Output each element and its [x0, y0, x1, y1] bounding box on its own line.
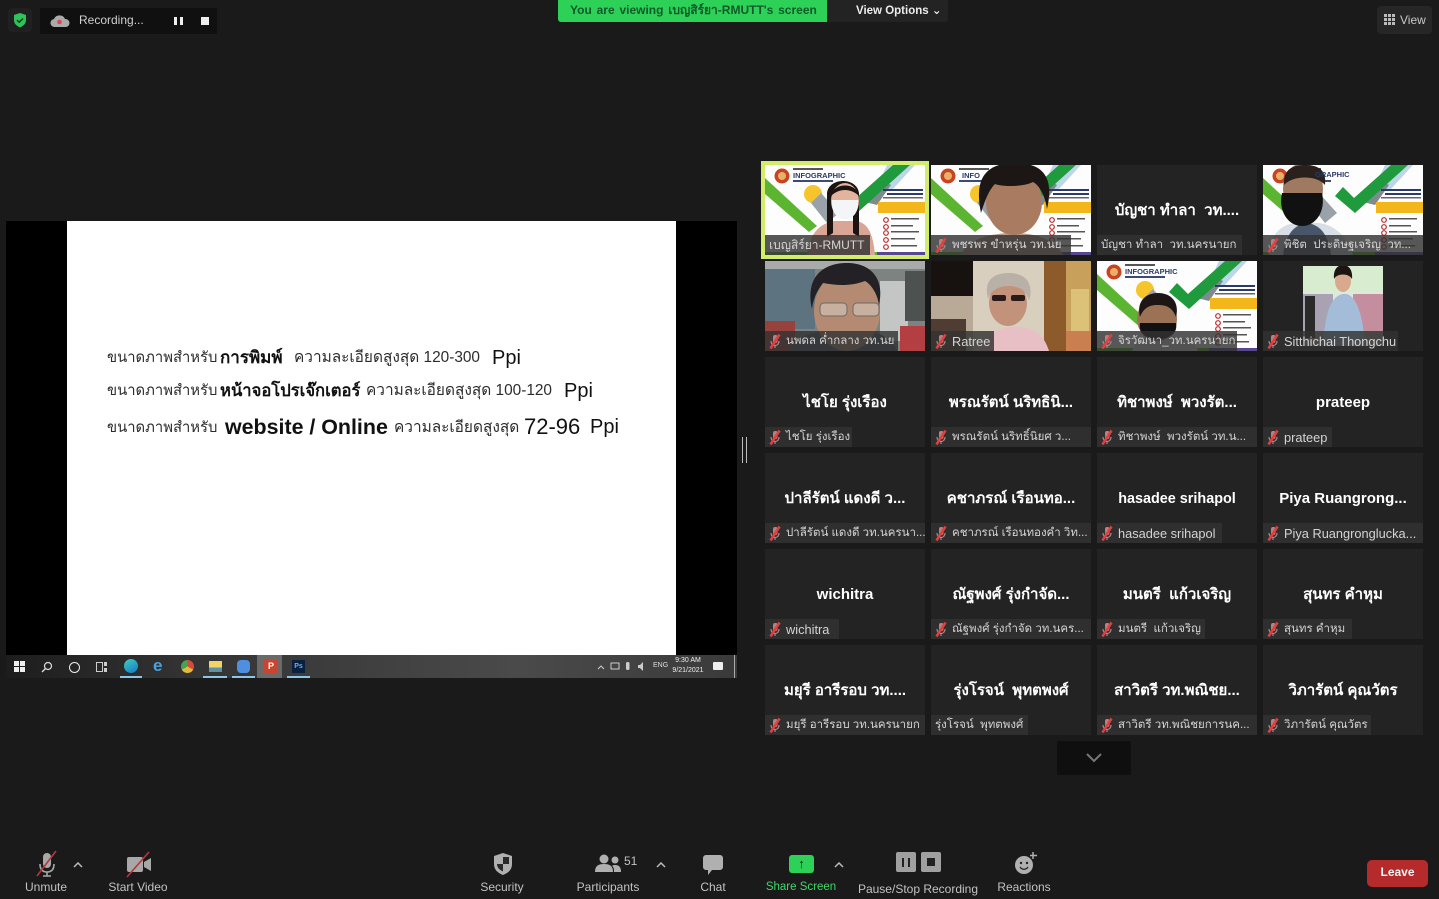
unmute label: Unmute	[25, 880, 67, 894]
name label	[765, 619, 839, 639]
security shield badge	[8, 8, 32, 32]
name label: Sitthichai Thongchu	[1284, 334, 1396, 349]
icon: recording cloud	[50, 15, 70, 27]
chat button	[700, 855, 726, 894]
icon: stop recording	[921, 852, 941, 872]
icon: chrome	[181, 660, 194, 673]
name label: บัญชา ทำลา วท.นครนายก	[1101, 239, 1236, 251]
display name: ทิชาพงษ์ พวงรัต...	[1117, 394, 1237, 411]
green viewing banner	[558, 0, 827, 22]
icon: chat bubble	[703, 855, 723, 875]
name label	[1263, 619, 1352, 639]
slide line 2: projector resolution: หน้าจอโปรเจ๊กเตอร์	[220, 381, 360, 400]
icon: zoom app	[237, 660, 250, 673]
slide line 1: print resolution: ขนาดภาพสำหรับ	[107, 350, 217, 366]
tile: คชาภรณ์ เรือนทองคำ	[931, 453, 1091, 543]
icon: grid	[1384, 14, 1395, 25]
display name: พรณรัตน์ นริทธินิ...	[949, 394, 1073, 411]
name label: พิชิต ประดิษฐเจริญ วท...	[1284, 239, 1411, 251]
tile: ทิชาพงษ์ พวงรัตน์	[1097, 357, 1257, 447]
name label	[1263, 235, 1423, 255]
tile: พิชิต ประดิษฐเจริญ	[1263, 165, 1423, 255]
name label: wichitra	[786, 622, 829, 637]
participants button	[577, 854, 639, 894]
icon: pause	[174, 17, 183, 25]
name label	[931, 523, 1091, 543]
icon: smiley with plus	[1015, 852, 1037, 874]
leave button	[1367, 860, 1428, 887]
icon: photoshop: Ps	[294, 663, 303, 670]
slide line 2: projector resolution: ขนาดภาพสำหรับ	[107, 383, 217, 399]
slide page	[67, 221, 676, 655]
pause stop recording button	[858, 852, 978, 896]
share screen button	[766, 855, 836, 893]
slide line 3: web resolution	[107, 414, 619, 439]
name label	[931, 427, 1091, 447]
icon: muted microphone	[36, 850, 56, 877]
name label	[765, 523, 925, 543]
display name: ณัฐพงศ์ รุ่งกำจัด...	[952, 586, 1070, 603]
icon: share caret	[834, 862, 844, 868]
name label	[1097, 331, 1237, 351]
tile: สาวิตรี วท.พณิชย	[1097, 645, 1257, 735]
display name: Piya Ruangrong...	[1279, 490, 1407, 507]
name label	[1263, 523, 1423, 543]
name label: มยุรี อารีรอบ วท.นครนายก	[786, 719, 920, 731]
name label	[931, 331, 994, 351]
tile: พชรพร ขำหรุ่น	[931, 165, 1091, 255]
tile: prateep	[1263, 357, 1423, 447]
display name: มยุรี อารีรอบ วท....	[784, 682, 906, 699]
name label: คชาภรณ์ เรือนทองคำ วิท...	[952, 527, 1088, 539]
name label	[931, 715, 1028, 735]
toolbar	[25, 850, 1428, 896]
name label: hasadee srihapol	[1118, 526, 1215, 541]
display name: ปาลีรัตน์ แดงดี ว...	[785, 490, 905, 507]
tile: เบญสิร์ยา-RMUTT: INFOGRAPHIC	[793, 171, 846, 180]
recording label: Recording...	[79, 13, 144, 27]
icon: file explorer	[209, 661, 222, 672]
security button	[480, 853, 524, 894]
tile: รุ่งโรจน์ พุทตพงศ์	[931, 645, 1091, 735]
icon: search	[42, 662, 52, 672]
name label	[1097, 523, 1222, 543]
display name: สาวิตรี วท.พณิชย...	[1114, 682, 1240, 699]
display name: มนตรี แก้วเจริญ	[1123, 586, 1231, 603]
icon: audio caret	[74, 862, 82, 868]
slide line 1: print resolution: การพิมพ์	[220, 348, 283, 367]
leave button: Leave	[1380, 865, 1415, 879]
pause stop recording label: Pause/Stop Recording	[858, 882, 978, 896]
tile: มนตรี แก้วเจริญ	[1097, 549, 1257, 639]
display name: wichitra	[817, 586, 873, 603]
icon: task view	[96, 662, 107, 672]
name label: นพดล ค่ำกลาง วท.นย	[786, 335, 894, 347]
slide line 3: web resolution: ขนาดภาพสำหรับ	[107, 420, 217, 436]
tile: Ratree	[931, 261, 1091, 351]
name label	[765, 235, 870, 255]
participants label: Participants	[577, 880, 639, 894]
slide line 3: web resolution: 72-96	[524, 414, 580, 439]
name label: พชรพร ขำหรุ่น วท.นย	[952, 239, 1061, 251]
start video label: Start Video	[108, 880, 168, 894]
clock: 9:30 AM	[675, 657, 701, 664]
name label: รุ่งโรจน์ พุทตพงศ์	[935, 719, 1023, 731]
icon: people	[595, 854, 621, 872]
icon: photoshop	[292, 660, 305, 673]
icon: internet explorer: e	[153, 656, 162, 675]
share screen label: Share Screen	[766, 881, 836, 893]
language indicator: ENG	[653, 662, 668, 669]
slide line 3: web resolution: ความละเอียดสูงสุด	[394, 419, 519, 436]
tile: จิรวัฒนา	[1097, 261, 1257, 351]
unmute button	[25, 850, 67, 894]
tile: ไชโย รุ่งเรือง	[765, 357, 925, 447]
display name: รุ่งโรจน์ พุทตพงศ์	[953, 682, 1069, 699]
tile: บัญชา ทำลา	[1097, 165, 1257, 255]
name label	[1097, 235, 1242, 255]
name label: เบญสิร์ยา-RMUTT	[769, 238, 864, 252]
slide line 1: print resolution: ความละเอียดสูงสุด 120-300	[294, 349, 480, 366]
chat label: Chat	[700, 880, 726, 894]
icon: notifications	[713, 662, 723, 670]
name label	[1263, 331, 1398, 351]
tile: สุนทร คำหุม	[1263, 549, 1423, 639]
slide line 1: print resolution	[107, 347, 521, 369]
reactions label: Reactions	[997, 880, 1051, 894]
tile: วิภารัตน์ คุณวัตร	[1263, 645, 1423, 735]
tile: พชรพร ขำหรุ่น: INFO	[962, 171, 980, 180]
next page button	[1057, 741, 1131, 775]
shared screen	[6, 221, 737, 678]
windows taskbar	[6, 655, 737, 678]
name label	[1097, 715, 1257, 735]
icon: chevron down	[1086, 753, 1102, 762]
icon: edge	[124, 659, 138, 673]
name label	[765, 715, 925, 735]
reactions button	[997, 852, 1051, 894]
slide line 3: web resolution: website / Online	[225, 415, 388, 439]
name label	[765, 427, 852, 447]
tile: จิรวัฒนา: INFOGRAPHIC	[1125, 267, 1178, 276]
name label	[1097, 619, 1205, 639]
name label: ปาลีรัตน์ แดงดี วท.นครนา...	[786, 527, 925, 539]
security label: Security	[480, 880, 524, 894]
icon: windows start	[14, 661, 25, 672]
icon: pause recording	[896, 852, 916, 872]
name label: จิรวัฒนา_วท.นครนายก	[1118, 335, 1235, 347]
panel divider handle	[742, 437, 747, 463]
tile: เบญสิร์ยา-RMUTT	[765, 165, 925, 255]
tile: พิชิต ประดิษฐเจริญ: GRAPHIC	[1315, 170, 1350, 179]
name label: สาวิตรี วท.พณิชยการนค...	[1118, 719, 1250, 731]
display name: วิภารัตน์ คุณวัตร	[1288, 682, 1398, 699]
tile: ณัฐพงศ์ รุ่งกำจัด	[931, 549, 1091, 639]
tile: wichitra	[765, 549, 925, 639]
tile: Sitthichai Thongchu	[1263, 261, 1423, 351]
name label: ไชโย รุ่งเรือง	[786, 431, 850, 443]
tile: พรณรัตน์ นริทธินิยศ	[931, 357, 1091, 447]
icon: share arrow: ↑	[798, 856, 805, 871]
name label	[1263, 715, 1371, 735]
tile: มยุรี อารีรอบ	[765, 645, 925, 735]
slide line 3: web resolution: Ppi	[590, 416, 619, 438]
clock	[672, 657, 704, 674]
name label	[931, 619, 1091, 639]
start video button	[108, 852, 168, 894]
view layout button	[1377, 6, 1432, 34]
display name: สุนทร คำหุม	[1303, 586, 1383, 603]
icon: video off	[126, 852, 151, 878]
display name: prateep	[1316, 394, 1370, 411]
slide line 1: print resolution: Ppi	[492, 347, 521, 369]
participant count: 51	[624, 854, 637, 868]
icon: powerpoint: P	[268, 661, 274, 671]
slide line 2: projector resolution: Ppi	[564, 380, 593, 402]
active speaker highlight	[761, 161, 929, 259]
view label: View	[1400, 13, 1426, 27]
name label: ณัฐพงศ์ รุ่งกำจัด วท.นคร...	[952, 623, 1084, 635]
recording status bar	[40, 8, 217, 34]
slide line 2: projector resolution: ความละเอียดสูงสุด 100-120	[366, 382, 552, 399]
name label: สุนทร คำหุม	[1284, 623, 1345, 635]
display name: คชาภรณ์ เรือนทอ...	[947, 490, 1075, 507]
name label: มนตรี แก้วเจริญ	[1118, 623, 1201, 635]
name label: วิภารัตน์ คุณวัตร	[1284, 719, 1368, 731]
name label	[1097, 427, 1257, 447]
tile: Piya Ruangronglucka	[1263, 453, 1423, 543]
icon: stop	[201, 17, 209, 25]
icon: share arrow	[789, 855, 814, 873]
name label	[765, 331, 898, 351]
slide line 2: projector resolution	[107, 380, 593, 402]
tile: hasadee srihapol	[1097, 453, 1257, 543]
icon: shield	[494, 853, 512, 875]
name label	[1263, 427, 1332, 447]
icon: cortana	[69, 662, 80, 673]
icon: powerpoint	[257, 655, 282, 678]
name label: prateep	[1284, 430, 1327, 445]
name label: Piya Ruangronglucka...	[1284, 526, 1416, 541]
display name: ไชโย รุ่งเรือง	[803, 394, 887, 411]
name label: ทิชาพงษ์ พวงรัตน์ วท.น...	[1118, 431, 1246, 443]
name label	[931, 235, 1071, 255]
view options button	[827, 0, 948, 22]
green viewing banner: You are viewing เบญสิร์ยา-RMUTT's screen	[570, 3, 817, 17]
tile: นพดล ค่ำกลาง	[765, 261, 925, 351]
name label: พรณรัตน์ นริทธิ์นิยศ ว...	[952, 431, 1071, 443]
display name: บัญชา ทำลา วท....	[1115, 202, 1239, 219]
tile: ปาลีรัตน์ แดงดี	[765, 453, 925, 543]
display name: hasadee srihapol	[1118, 491, 1236, 507]
clock: 9/21/2021	[672, 667, 704, 674]
icon: participants caret	[656, 862, 666, 868]
view options button: View Options ⌄	[856, 5, 941, 17]
name label: Ratree	[952, 334, 990, 349]
system tray icons	[598, 662, 643, 671]
